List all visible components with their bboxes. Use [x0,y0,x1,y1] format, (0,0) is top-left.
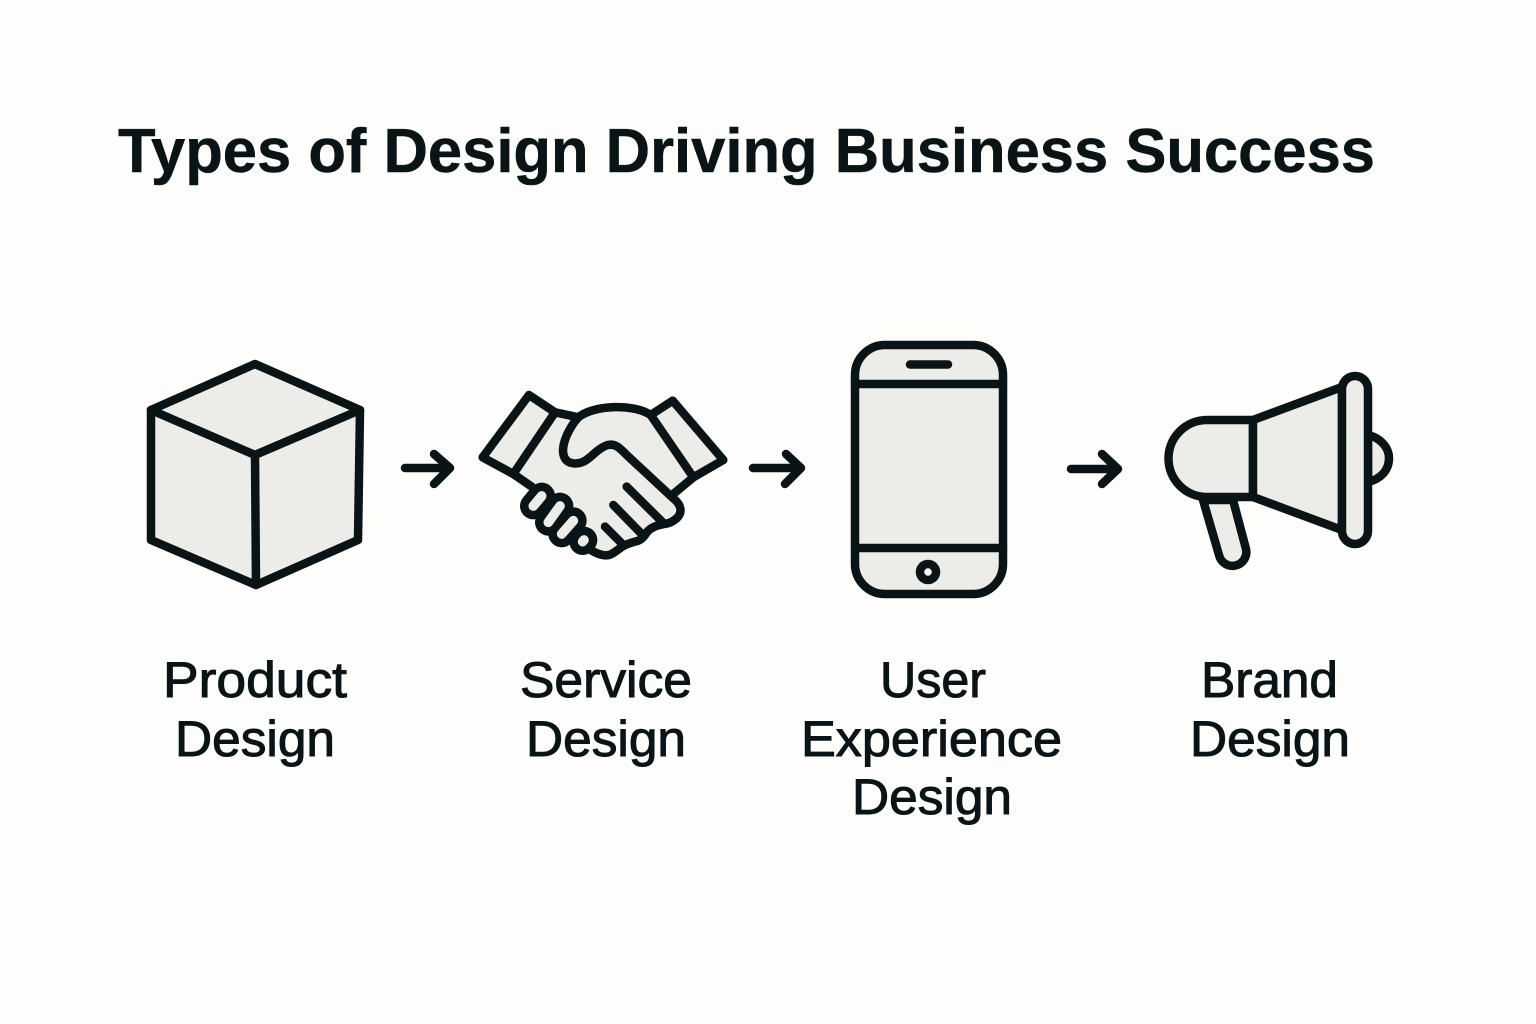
label: product design [163,652,347,767]
label: user experience design [801,652,1062,825]
panel: brand design [1168,376,1389,767]
label: brand design: Brand [1201,652,1338,708]
icon: megaphone [1168,376,1389,566]
icon: box [151,364,360,585]
arrow: user experience to brand [1071,454,1118,484]
icon: handshake [483,395,723,556]
label: brand design [1190,652,1350,767]
label: user experience design: Design [852,769,1012,825]
label: user experience design: Experience [801,711,1062,767]
arrow: product to service [405,454,450,484]
label: service design: Design [526,711,686,767]
title: Types of Design Driving Business Success [118,117,1375,186]
label: service design: Service [520,652,692,708]
panel: service design [483,395,723,767]
label: brand design: Design [1190,711,1350,767]
label: product design: Design [175,711,335,767]
label: service design [520,652,692,767]
label: user experience design: User [880,652,986,708]
arrow: service to user experience [753,454,801,484]
icon: smartphone [855,345,1003,594]
label: product design: Product [163,652,347,708]
panel: product design [151,364,360,767]
panel: user experience design [801,345,1062,825]
